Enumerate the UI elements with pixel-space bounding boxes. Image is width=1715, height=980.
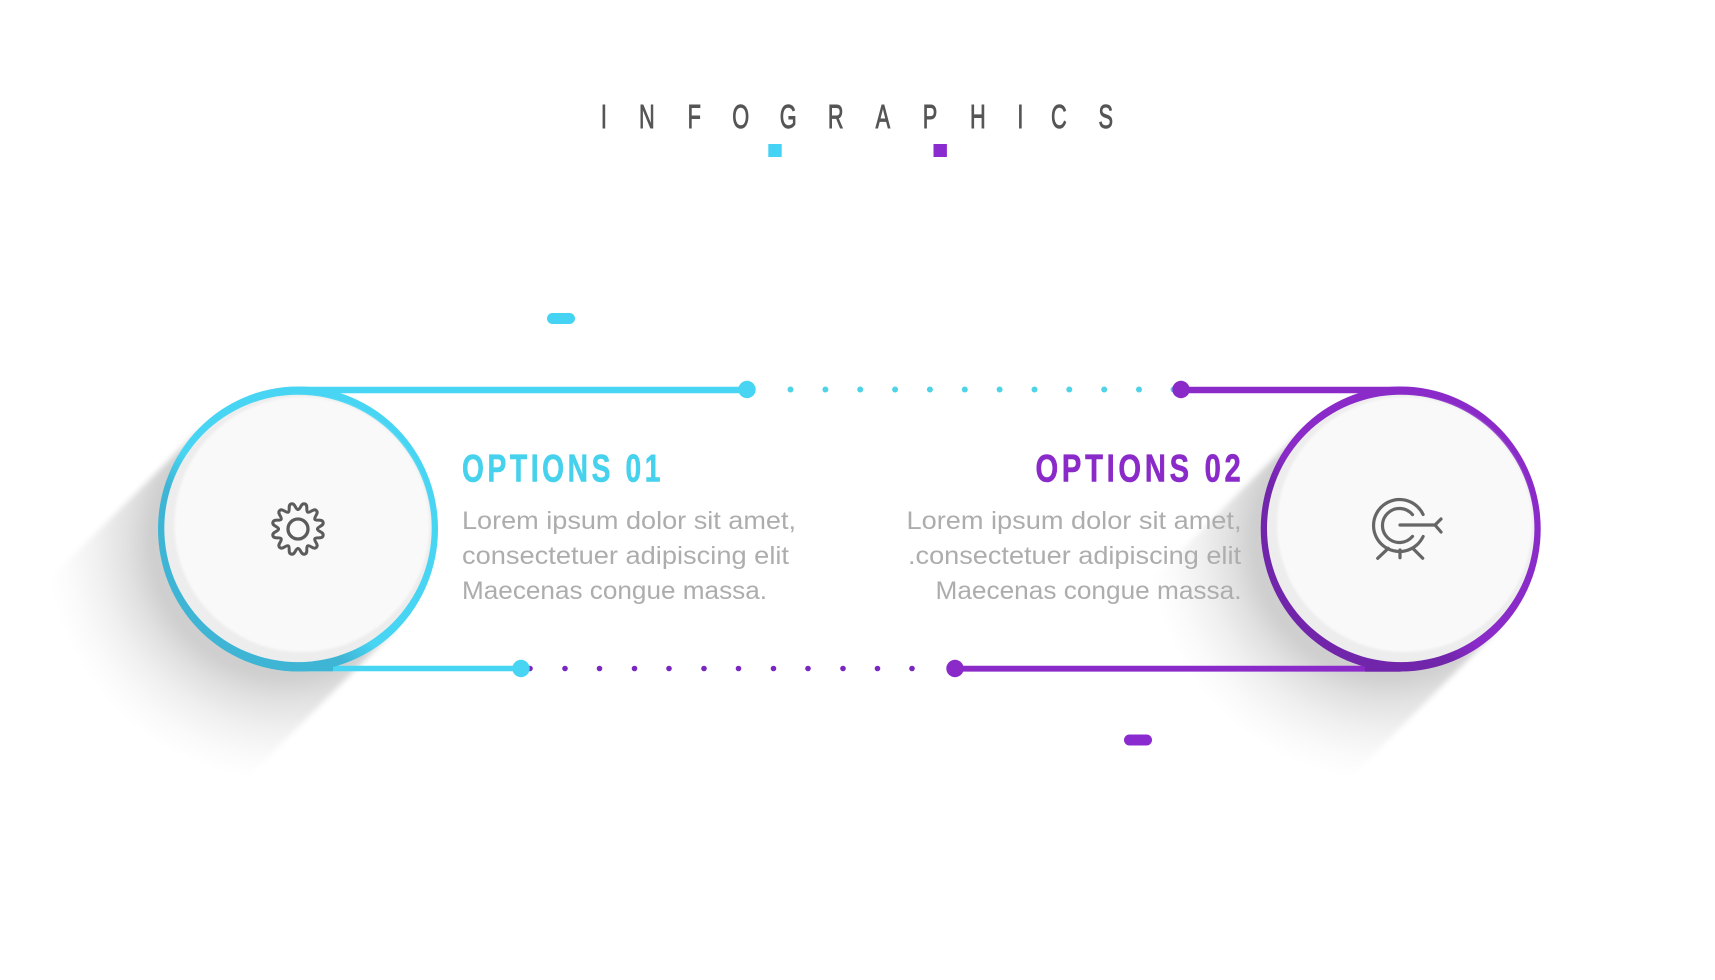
inner disc bbox=[164, 395, 432, 662]
outer ring bbox=[1261, 386, 1541, 672]
accent pill: purple bbox=[1124, 734, 1152, 746]
text block: options 01 bbox=[462, 507, 796, 605]
long shadow: left circle bbox=[1, 430, 397, 826]
panel: option 1 circle with lines bbox=[158, 381, 756, 677]
icon: gear bbox=[272, 503, 324, 555]
top line with end dot bbox=[298, 381, 756, 398]
long shadow: right circle bbox=[1104, 430, 1500, 826]
bottom line with end dot bbox=[298, 660, 530, 677]
top line with end dot bbox=[1172, 381, 1401, 398]
outer ring bbox=[158, 386, 438, 672]
title accent: cyan square bbox=[768, 144, 782, 157]
bottom line with end dot bbox=[946, 660, 1401, 677]
heading: options 01: OPTIONS 01 bbox=[462, 448, 664, 490]
heading: options 02: OPTIONS 02 bbox=[1036, 448, 1244, 490]
dotted connector: top cyan bbox=[788, 386, 1176, 392]
text block: options 02 bbox=[906, 507, 1242, 605]
title: INFOGRAPHICS bbox=[601, 97, 1113, 135]
panel: option 2 circle with lines bbox=[946, 381, 1541, 677]
text block: options 02: .consectetuer adipiscing elit bbox=[908, 542, 1241, 570]
title accent: purple square bbox=[934, 144, 947, 157]
text block: options 01: Lorem ipsum dolor sit amet, bbox=[462, 507, 796, 535]
inner disc bbox=[1267, 395, 1534, 662]
text block: options 02: Maecenas congue massa. bbox=[936, 577, 1242, 605]
accent pill: cyan bbox=[547, 313, 575, 324]
dotted connector: bottom purple bbox=[527, 666, 915, 671]
text block: options 01: consectetuer adipiscing elit bbox=[462, 542, 789, 570]
text block: options 01: Maecenas congue massa. bbox=[462, 577, 767, 605]
icon: target with arrow bbox=[1374, 500, 1441, 558]
text block: options 02: Lorem ipsum dolor sit amet, bbox=[906, 507, 1242, 535]
